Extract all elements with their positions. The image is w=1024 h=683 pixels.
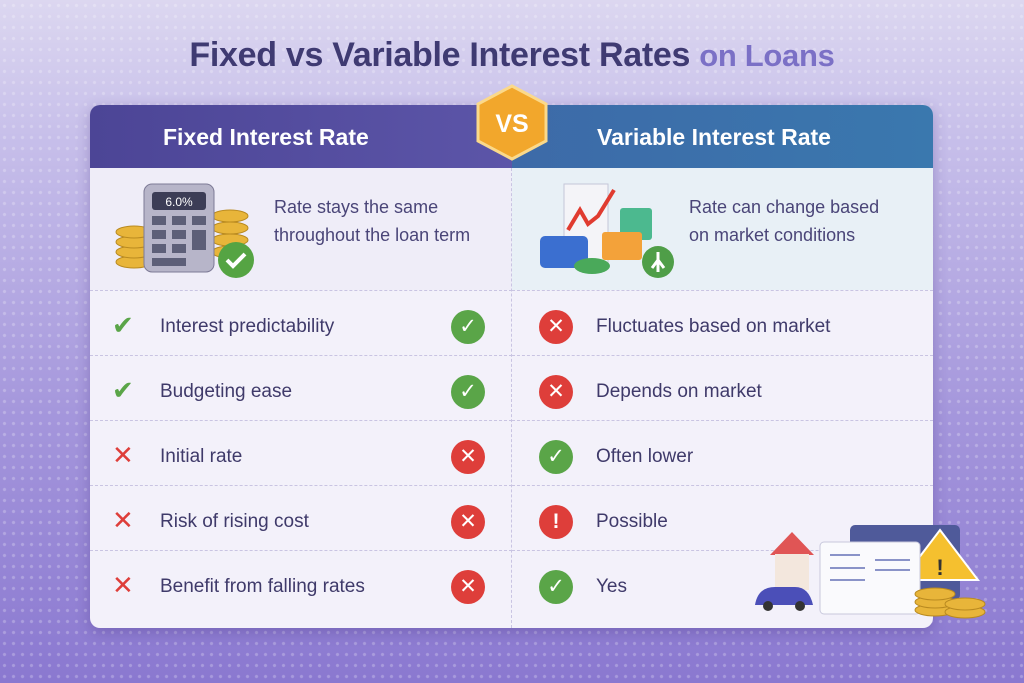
VS badge: VS <box>495 110 529 138</box>
rows: left column: Budgeting ease <box>160 381 292 402</box>
info: variable: Rate can change based <box>689 197 879 217</box>
info: variable: on market conditions <box>689 225 855 245</box>
rows: right column: Yes <box>596 576 627 597</box>
rows: left column: ✔ <box>112 310 134 340</box>
icon: calculator with coins <box>116 184 254 278</box>
rows: left column: Initial rate <box>160 446 242 467</box>
rows: right column: Possible <box>596 511 668 532</box>
header: variable <box>512 105 933 168</box>
info: fixed: throughout the loan term <box>274 225 470 245</box>
VS badge <box>476 84 548 161</box>
illustration: house car document coins <box>755 525 986 618</box>
rows: left column: ✕ <box>112 570 134 600</box>
rows: right column: ✕ <box>547 380 565 403</box>
rows: left column: ✓ <box>459 315 477 338</box>
rows: right column: Often lower <box>596 446 693 467</box>
rows: right column: ✓ <box>547 575 565 598</box>
rows: right column: ✓ <box>547 445 565 468</box>
header: variable: Variable Interest Rate <box>597 124 831 150</box>
rows: left column: Interest predictability <box>160 316 334 337</box>
illustration: house car document coins: ! <box>936 555 944 580</box>
info: fixed <box>90 168 512 290</box>
rows: left column: ✔ <box>112 375 134 405</box>
rows: left column: ✕ <box>459 575 477 598</box>
rows: left column: ✕ <box>459 510 477 533</box>
header: fixed <box>90 105 512 168</box>
rows: left column: ✕ <box>459 445 477 468</box>
icon: chart and cards <box>540 184 674 278</box>
rows: left column <box>90 290 511 604</box>
rows: left column: Benefit from falling rates <box>160 576 365 597</box>
rows: left column: Risk of rising cost <box>160 511 309 532</box>
rows: right column: ✕ <box>547 315 565 338</box>
rows: right column: ! <box>552 510 560 533</box>
panel: comparison <box>90 105 933 628</box>
rows: right column: Depends on market <box>596 381 762 402</box>
rows: left column: ✕ <box>112 505 134 535</box>
rows: left column: ✕ <box>112 440 134 470</box>
info: variable <box>512 168 933 290</box>
rows: right column <box>512 290 933 604</box>
icon: calculator with coins: 6.0% <box>165 195 193 209</box>
info: fixed: Rate stays the same <box>274 197 438 217</box>
rows: right column: Fluctuates based on market <box>596 316 830 337</box>
title: Fixed vs Variable Interest Rates on Loans <box>189 36 835 74</box>
rows: left column: ✓ <box>459 380 477 403</box>
header: fixed: Fixed Interest Rate <box>163 124 369 150</box>
